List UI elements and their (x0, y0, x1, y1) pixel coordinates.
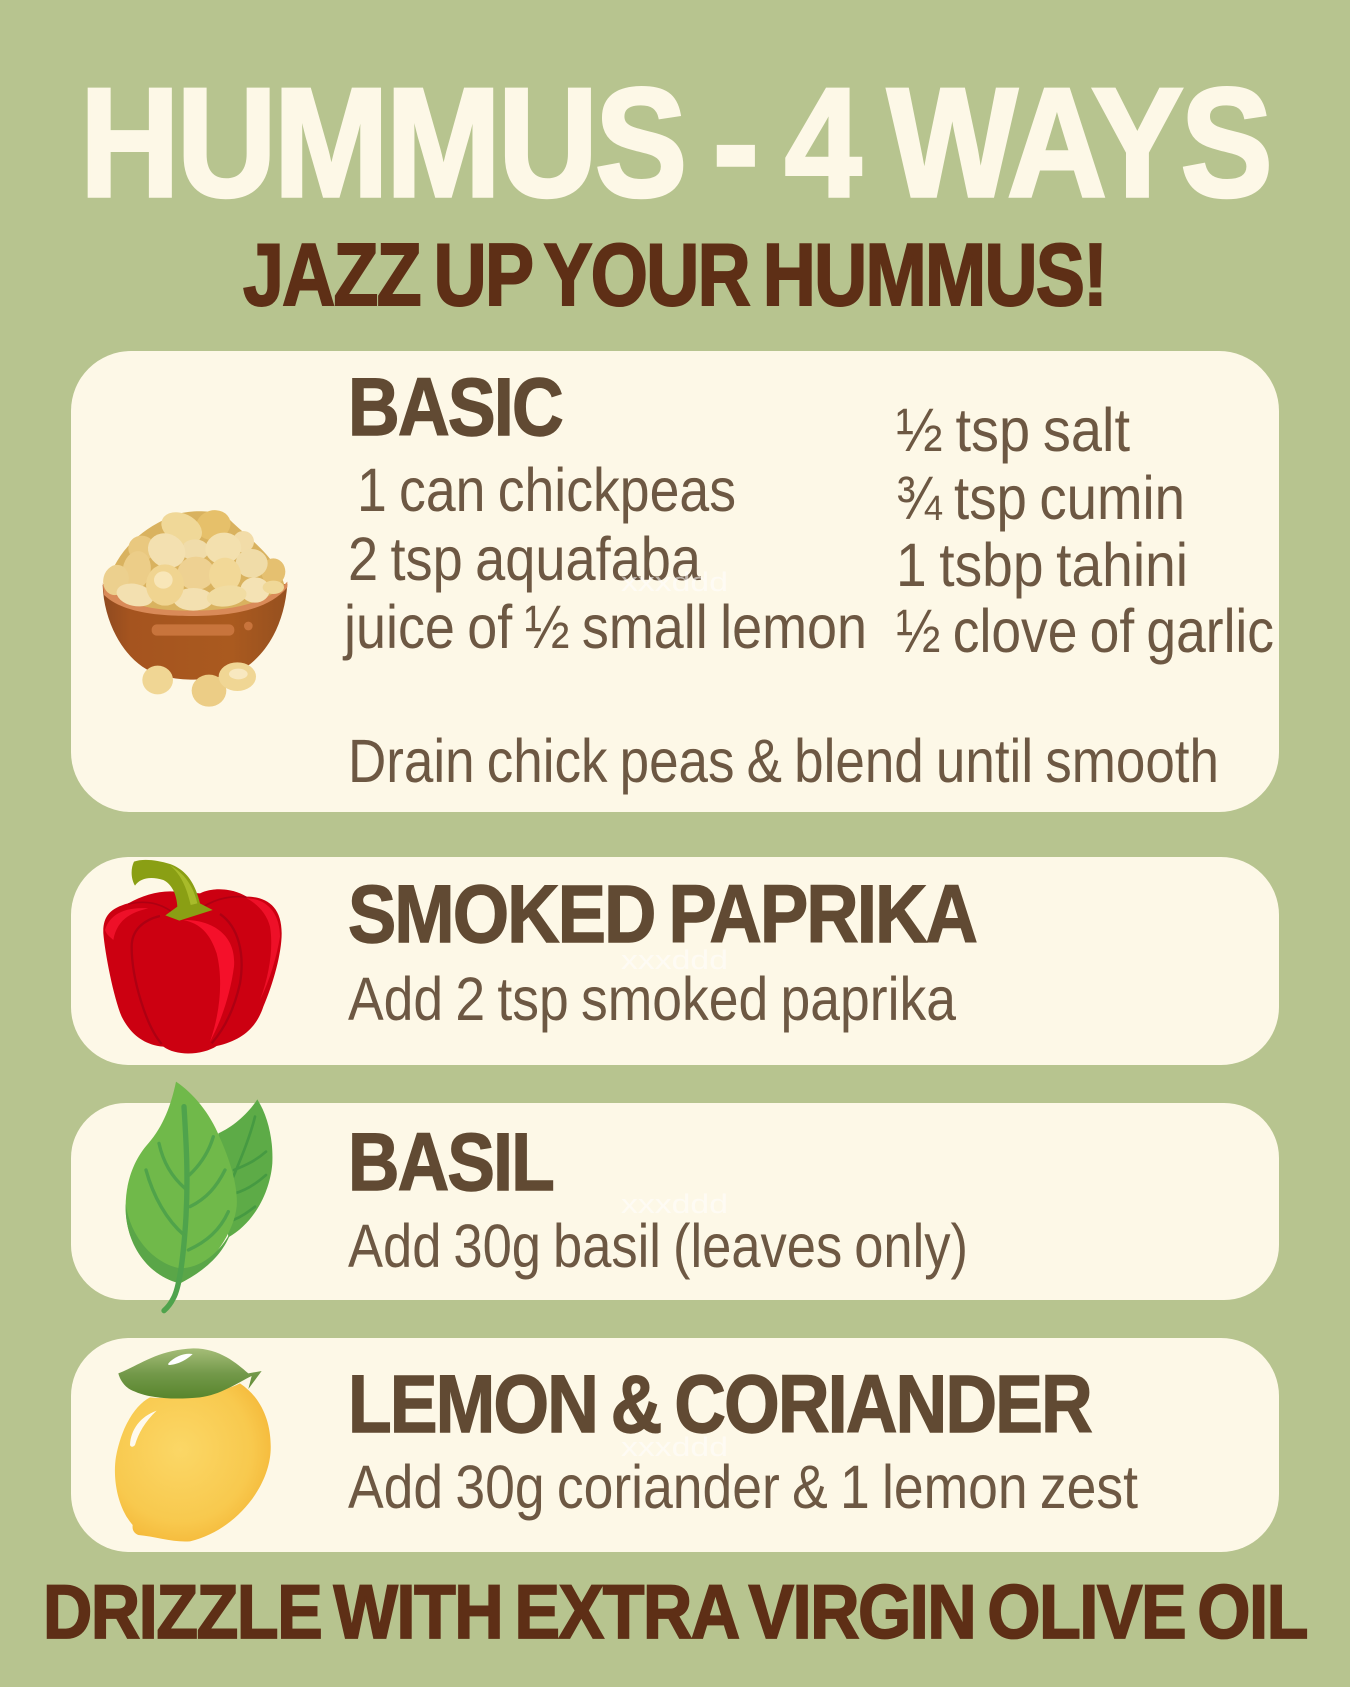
watermark: xxxddd (621, 1432, 728, 1462)
subtitle: JAZZ UP YOUR HUMMUS! (243, 225, 1106, 324)
instruction: Add 30g basil (leaves only) (348, 1212, 968, 1280)
panel: basil (71, 1082, 1279, 1311)
ingredient list, left column: juice of ½ small lemon (342, 593, 867, 661)
ingredient list, left column: 1 can chickpeas (357, 456, 736, 524)
ingredient list, right column: ½ clove of garlic (896, 597, 1274, 665)
panel: lemon and coriander (71, 1338, 1279, 1552)
ingredient list, right column (896, 396, 1274, 665)
icon: red bell pepper (103, 860, 282, 1053)
watermark: xxxddd (621, 567, 728, 597)
heading: basic: BASIC (348, 362, 562, 453)
heading: lemon and coriander: LEMON & CORIANDER (348, 1359, 1092, 1450)
instruction: Add 2 tsp smoked paprika (348, 965, 956, 1033)
heading: basil: BASIL (348, 1117, 553, 1208)
ingredient list, right column: 1 tsbp tahini (896, 531, 1188, 599)
icon: basil leaves (126, 1082, 272, 1311)
ingredient list, right column: ¾ tsp cumin (896, 464, 1185, 532)
panel: smoked paprika (71, 857, 1279, 1065)
ingredient list, right column: ½ tsp salt (896, 396, 1130, 464)
heading: smoked paprika: SMOKED PAPRIKA (348, 869, 977, 960)
watermark: xxxddd (621, 945, 728, 975)
ingredient list, left column (342, 456, 867, 661)
ingredient list, left column: 2 tsp aquafaba (348, 525, 701, 593)
instruction: Add 30g coriander & 1 lemon zest (348, 1453, 1138, 1521)
icon: bowl of chickpeas (100, 506, 287, 707)
icon: lemon (115, 1348, 271, 1542)
watermark: xxxddd (621, 1189, 728, 1219)
method: Drain chick peas & blend until smooth (348, 727, 1219, 795)
panel: basic recipe (71, 351, 1279, 812)
